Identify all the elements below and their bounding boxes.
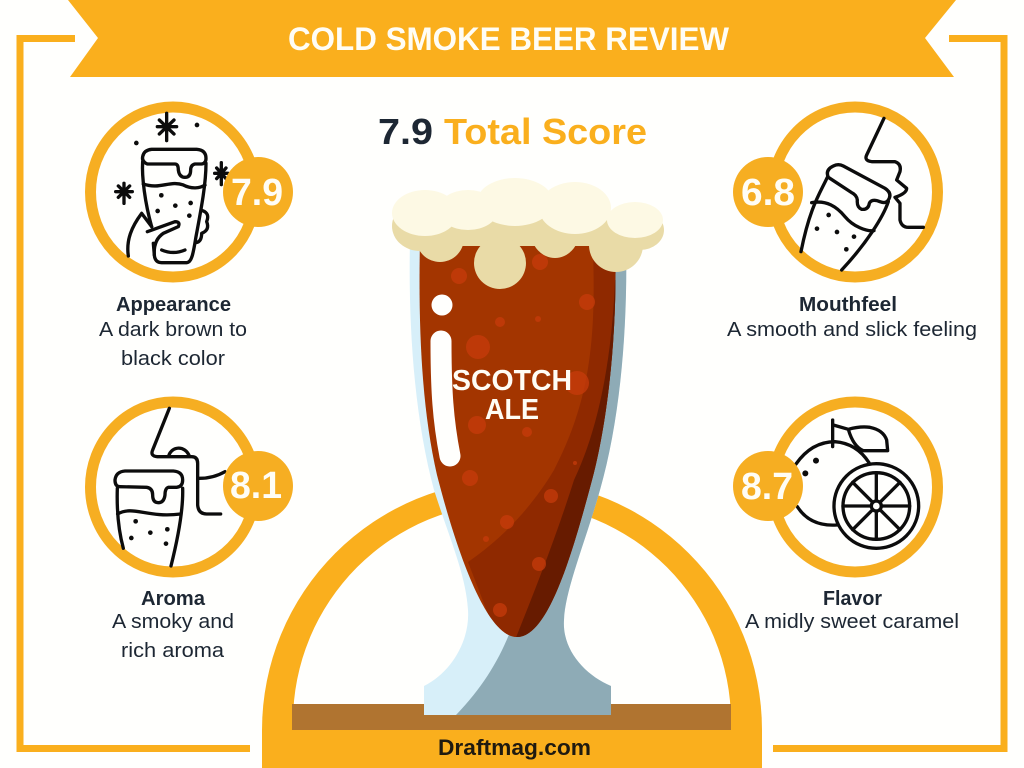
total score heading: 7.9 — [378, 111, 433, 152]
aroma text: rich aroma — [121, 640, 225, 662]
beer glass — [392, 178, 664, 720]
panel: aroma — [90, 402, 293, 662]
title banner — [68, 0, 956, 77]
mouthfeel text: A smooth and slick feeling — [727, 319, 977, 341]
flavor ring — [772, 402, 938, 572]
beer style label — [452, 365, 572, 426]
panel: appearance — [90, 107, 293, 370]
flavor score badge — [733, 451, 803, 521]
flavor text: A midly sweet caramel — [745, 611, 959, 633]
title banner: COLD SMOKE BEER REVIEW — [288, 21, 730, 57]
aroma ring — [90, 402, 256, 572]
foam — [392, 178, 664, 289]
appearance text — [99, 294, 247, 370]
icon: beer in hand with sparkles — [116, 113, 228, 263]
frame: left bracket — [20, 38, 250, 748]
icon: orange and citrus slice — [796, 420, 919, 548]
icon: sipping beer — [801, 118, 923, 270]
aroma text — [112, 588, 234, 662]
aroma score badge: 8.1 — [230, 465, 282, 507]
total score heading: Total Score — [444, 111, 647, 152]
mouthfeel text: Mouthfeel — [799, 294, 897, 316]
appearance score badge: 7.9 — [231, 172, 283, 214]
source credit: Draftmag.com — [438, 735, 591, 760]
flavor text — [745, 588, 959, 633]
appearance text: black color — [121, 348, 225, 370]
panel: mouthfeel — [727, 107, 977, 341]
appearance ring — [90, 107, 256, 277]
appearance text: A dark brown to — [99, 319, 247, 341]
appearance text: Appearance — [116, 294, 231, 316]
mouthfeel ring — [772, 107, 938, 277]
mouthfeel score badge — [733, 157, 803, 227]
flavor score badge: 8.7 — [741, 466, 793, 508]
flavor text: Flavor — [823, 588, 882, 610]
beer style label: ALE — [485, 394, 539, 426]
frame: right bracket — [773, 38, 1004, 748]
beer style label: SCOTCH — [452, 365, 572, 397]
glass highlight — [432, 294, 452, 456]
panel: flavor — [733, 402, 959, 633]
mouthfeel score badge: 6.8 — [741, 172, 795, 214]
mouthfeel text — [727, 294, 977, 341]
aroma score badge — [223, 451, 293, 521]
beer liquid — [420, 246, 616, 637]
appearance score badge — [223, 157, 293, 227]
arch base behind glass — [262, 480, 762, 768]
aroma text: Aroma — [141, 588, 206, 610]
icon: nose smelling beer — [115, 408, 225, 566]
aroma text: A smoky and — [112, 611, 234, 633]
